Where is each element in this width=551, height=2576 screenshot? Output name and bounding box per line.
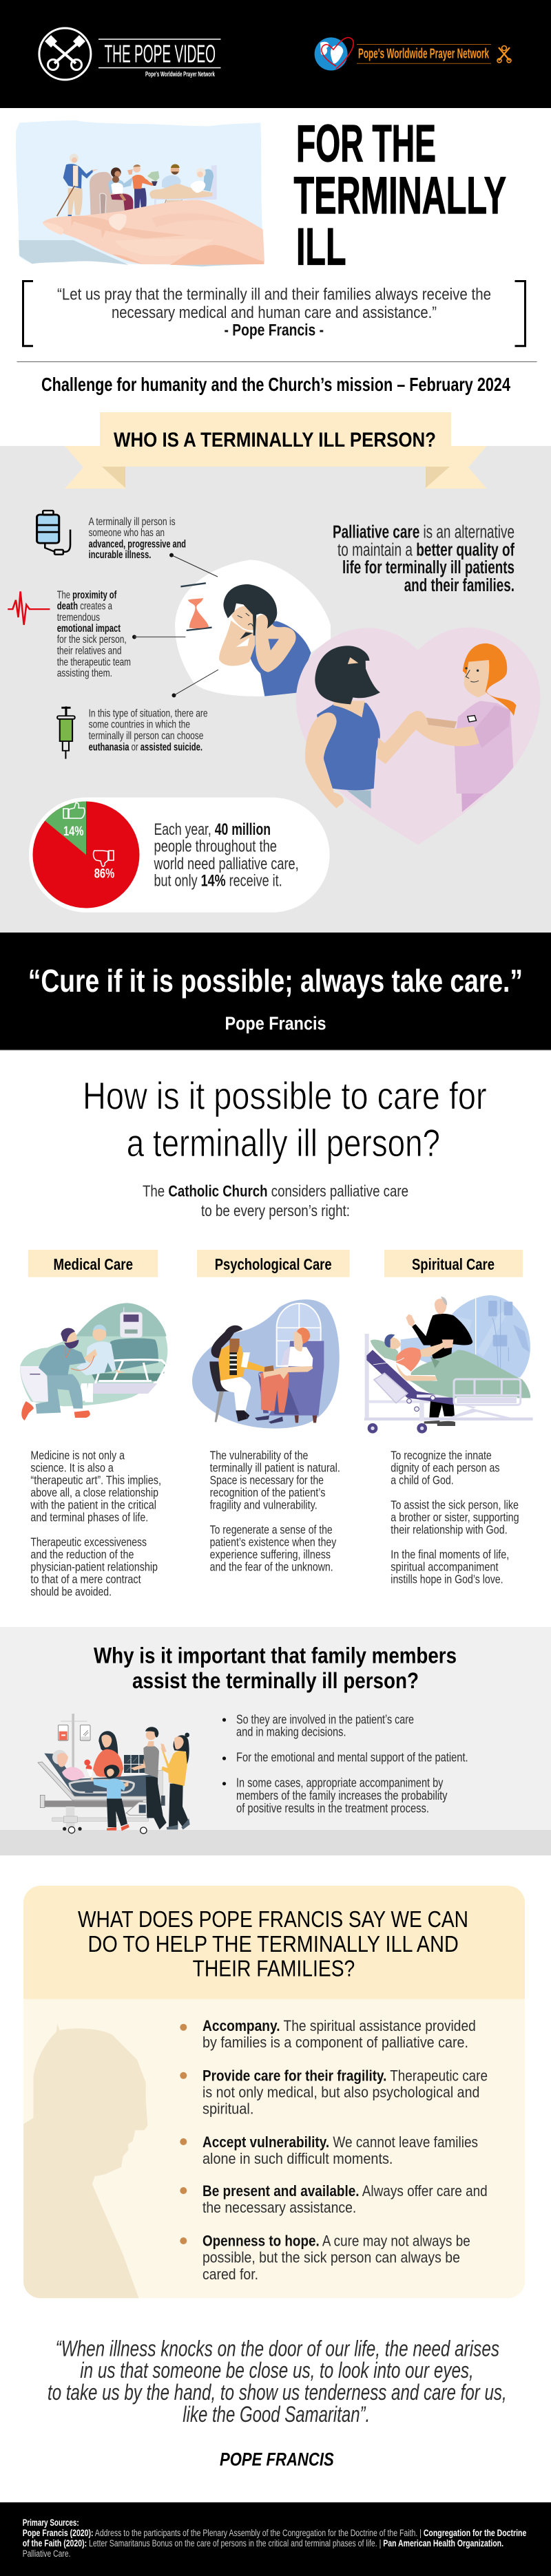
- title: [293, 115, 506, 277]
- care text: medical: and terminal phases of life.: [30, 1511, 148, 1524]
- child patient: [76, 1325, 125, 1402]
- icons on grey panel, reference coords: [8, 511, 75, 759]
- care text: medical: and the reduction of the: [30, 1548, 134, 1562]
- bullet list: [222, 1712, 468, 1815]
- prayer quote with brackets: - Pope Francis -: [225, 321, 324, 340]
- banner: cure if it is possible: [0, 933, 551, 1050]
- banner: cure if it is possible: Pope Francis: [225, 1013, 326, 1034]
- woman in yellow: [160, 1733, 190, 1829]
- closing quote: like the Good Samaritan”.: [183, 2402, 370, 2427]
- leader lines: [132, 553, 218, 697]
- callout text: euthanasia: [89, 708, 208, 753]
- icon: heartbeat: [8, 591, 50, 625]
- care text: spiritual: In the final moments of life,: [391, 1548, 509, 1562]
- patient: [371, 1334, 530, 1398]
- pie chart: 14 / 86: [33, 801, 139, 908]
- heading: [94, 1643, 457, 1693]
- callout text: proximity of death: for the sick person,: [57, 634, 127, 646]
- care text: spiritual: spiritual accompaniment: [391, 1560, 499, 1574]
- bullet list: of positive results in the treatment process.: [236, 1801, 429, 1815]
- heading: Why is it important that family members: [94, 1643, 457, 1668]
- list of five actions: Provide care for their fragility. Therapeutic care: [202, 2067, 488, 2084]
- armchair: [258, 1341, 324, 1416]
- care text: spiritual: a child of God.: [391, 1473, 454, 1487]
- logo: Pope's Worldwide Prayer Network: [315, 37, 511, 70]
- label: psychological care: Psychological Care: [215, 1255, 332, 1273]
- heading: assist the terminally ill person?: [132, 1668, 419, 1693]
- illustration: psychological care: [192, 1299, 340, 1429]
- panel: 40 million statistic: people throughout the: [154, 838, 277, 856]
- panel: why family members: [0, 1627, 551, 1855]
- prayer quote with brackets: “Let us pray that the terminally ill and their families always receive the: [57, 286, 491, 304]
- right woman: [413, 643, 516, 812]
- palliative care statement: [333, 522, 514, 595]
- footer: primary sources: Pope Francis (2020): Address to the participants of the Plenary Assembly of the Congregation for the Doctrine of the Faith. | Congregation for the Doctrine: [23, 2528, 527, 2538]
- list of five actions: Be present and available. Always offer care and: [202, 2182, 488, 2200]
- callout text: proximity of death: assisting them.: [57, 668, 112, 679]
- list of five actions: Accompany. The spiritual assistance provided: [202, 2017, 476, 2034]
- care text: medical: science. It is also a: [30, 1461, 114, 1475]
- label: medical care: [28, 1250, 158, 1277]
- prayer quote with brackets: [23, 281, 525, 346]
- care text: spiritual: their relationship with God.: [391, 1523, 508, 1537]
- heart: [296, 628, 541, 845]
- care text: medical: Medicine is not only a: [30, 1449, 125, 1462]
- list of five actions: is not only medical, but also psychological and: [202, 2084, 479, 2100]
- panel: 40 million statistic: Each year, 40 million: [154, 820, 271, 839]
- bed: [364, 1334, 533, 1434]
- bed rail: [454, 1379, 521, 1405]
- footer: primary sources: [0, 2502, 551, 2576]
- care text: medical: with the patient in the critical: [30, 1498, 156, 1512]
- heading: DO TO HELP THE TERMINALLY ILL AND: [88, 1931, 459, 1957]
- child: [90, 1765, 129, 1831]
- care text: psychological: and the fear of the unknown.: [210, 1560, 333, 1574]
- title: FOR THE: [296, 115, 436, 173]
- label: spiritual care: [384, 1250, 523, 1277]
- icon: IV bag: [37, 511, 70, 555]
- callout text: proximity of death: the therapeutic team: [57, 657, 131, 668]
- care text: psychological: patient’s existence when they: [210, 1535, 336, 1549]
- pie chart: 14 / 86: 14%: [63, 824, 83, 839]
- intro text: Catholic Church: The Catholic Church considers palliative care: [143, 1182, 408, 1200]
- illustration: sad woman in white blob: [175, 560, 541, 845]
- panel: 40 million statistic: world need palliative care,: [154, 855, 299, 873]
- label: psychological care: [197, 1250, 350, 1277]
- footer: primary sources: Primary Sources:: [23, 2518, 79, 2528]
- care text: psychological: recognition of the patient’s: [210, 1486, 326, 1500]
- gift: [124, 1755, 145, 1773]
- care text: spiritual: [391, 1449, 519, 1586]
- man with flowers: [127, 164, 159, 211]
- bullet list: So they are involved in the patient’s care: [236, 1712, 414, 1726]
- list of five actions: [180, 2017, 488, 2283]
- list of five actions: possible, but the sick person can always be: [202, 2249, 460, 2266]
- care text: spiritual: a brother or sister, supporting: [391, 1511, 519, 1524]
- label: medical care: Medical Care: [54, 1255, 133, 1273]
- callout text: definition: incurable illness.: [89, 549, 151, 561]
- icon: syringe: [57, 706, 75, 759]
- care text: psychological: experience suffering, illness: [210, 1548, 331, 1562]
- silhouette of Pope Francis: [23, 2023, 147, 2298]
- ribbon heading: [65, 412, 487, 489]
- heading: how is it possible to care: a terminally ill person?: [127, 1121, 440, 1164]
- bullet list: In some cases, appropriate accompaniment by: [236, 1776, 443, 1789]
- callout text: definition: someone who has an: [89, 527, 165, 539]
- illustration: medical care: [20, 1303, 167, 1420]
- callout text: proximity of death: [57, 589, 131, 679]
- list of five actions: spiritual.: [202, 2100, 253, 2118]
- intro text: Catholic Church: [143, 1182, 408, 1220]
- callout text: proximity of death: tremendous: [57, 612, 100, 624]
- bed: [38, 1754, 165, 1833]
- armchair with woman and child: [90, 167, 133, 217]
- title: ILL: [296, 218, 346, 277]
- care text: medical: to that of a mere contract: [30, 1573, 141, 1586]
- heading: WHAT DOES POPE FRANCIS SAY WE CAN: [78, 1906, 468, 1932]
- flowers: [84, 1760, 92, 1779]
- palliative care statement: and their families.: [404, 576, 514, 595]
- section: who is a terminally ill person background: [0, 446, 551, 933]
- callout text: euthanasia: euthanasia or assisted suicide.: [89, 741, 202, 753]
- illustration: spiritual care: [364, 1295, 533, 1434]
- care text: psychological: To regenerate a sense of the: [210, 1523, 333, 1537]
- care text: medical: “therapeutic art”. This implies,: [30, 1473, 161, 1487]
- callout text: proximity of death: their relatives and: [57, 646, 121, 657]
- patient: [255, 1328, 313, 1424]
- patient in bed with bearded man: [149, 164, 217, 212]
- hand: [43, 200, 264, 265]
- care text: psychological: [210, 1449, 340, 1574]
- prayer quote with brackets: necessary medical and human care and assistance.”: [112, 304, 437, 322]
- callout text: definition: [89, 516, 186, 561]
- heading: THEIR FAMILIES?: [193, 1956, 355, 1981]
- left woman: [305, 646, 425, 809]
- list of five actions: cared for.: [202, 2266, 258, 2283]
- callout text: proximity of death: The proximity of: [57, 589, 117, 602]
- care text: spiritual: To assist the sick person, like: [391, 1498, 519, 1512]
- header band: [0, 0, 551, 108]
- old man: [57, 153, 98, 217]
- callout text: definition: A terminally ill person is: [89, 516, 176, 528]
- callout text: euthanasia: In this type of situation, there are: [89, 708, 208, 720]
- care text: medical: [30, 1449, 161, 1599]
- visitor: [209, 1326, 274, 1423]
- care text: medical: physician-patient relationship: [30, 1560, 158, 1574]
- label: spiritual care: Spiritual Care: [412, 1255, 495, 1273]
- care text: psychological: The vulnerability of the: [210, 1449, 308, 1462]
- callout text: euthanasia: terminally ill person can choose: [89, 730, 203, 742]
- intro text: Catholic Church: to be every person’s right:: [201, 1202, 350, 1220]
- panel: 40 million statistic: but only 14% receive it.: [154, 872, 282, 891]
- list of five actions: by families is a component of palliative care.: [202, 2034, 468, 2051]
- heading: [78, 1906, 468, 1981]
- woman in red: [93, 1731, 123, 1777]
- callout text: proximity of death: death creates a: [57, 601, 112, 613]
- priest: [406, 1297, 472, 1426]
- logo: The Pope Video: THE POPE VIDEO: [105, 40, 216, 68]
- grandmother: [52, 1750, 85, 1780]
- doctor: [21, 1328, 97, 1420]
- heading: how is it possible to care: [83, 1074, 487, 1164]
- list of five actions: the necessary assistance.: [202, 2199, 356, 2216]
- list of five actions: Accept vulnerability. We cannot leave families: [202, 2133, 478, 2151]
- care text: medical: Therapeutic excessiveness: [30, 1535, 147, 1549]
- care text: spiritual: dignity of each person as: [391, 1461, 500, 1475]
- closing quote: POPE FRANCIS: [220, 2449, 334, 2470]
- list of five actions: alone in such difficult moments.: [202, 2150, 393, 2167]
- care text: medical: should be avoided.: [30, 1585, 112, 1599]
- panel: 40 million statistic: [29, 798, 330, 913]
- care text: spiritual: To recognize the innate: [391, 1449, 492, 1462]
- care text: medical: above all, a close relationship: [30, 1486, 158, 1500]
- ribbon heading: WHO IS A TERMINALLY ILL PERSON?: [114, 429, 436, 451]
- pie chart: 14 / 86: 86%: [94, 867, 114, 882]
- bullet list: For the emotional and mental support of the patient.: [236, 1750, 468, 1764]
- care text: psychological: Space is necessary for the: [210, 1473, 324, 1487]
- palliative care statement: to maintain a better quality of: [337, 541, 514, 560]
- care text: spiritual: instills hope in God’s love.: [391, 1573, 503, 1586]
- footer: primary sources: of the Faith (2020): Letter Samaritanus Bonus on the care of persons in the critical and terminal phases of life. | Pan American Health Organization.: [23, 2538, 503, 2548]
- closing quote: [48, 2336, 507, 2470]
- panel: what does Pope Francis say: [23, 1886, 525, 2298]
- list of five actions: Openness to hope. A cure may not always be: [202, 2233, 470, 2249]
- hero illustration: family on a hand: [16, 120, 264, 266]
- heading: how is it possible to care: How is it possible to care for: [83, 1074, 487, 1118]
- logo: The Pope Video: [39, 28, 221, 80]
- man in grey: [131, 1727, 167, 1829]
- palliative care statement: Palliative care is an alternative: [333, 522, 514, 542]
- callout text: definition: advanced, progressive and: [89, 539, 186, 551]
- callout text: proximity of death: emotional impact: [57, 623, 121, 635]
- bullet list: and in making decisions.: [236, 1725, 346, 1739]
- sad woman figure: [219, 584, 311, 696]
- footer: primary sources: Palliative Care.: [23, 2548, 71, 2559]
- bullet list: members of the family increases the probability: [236, 1789, 448, 1802]
- care text: psychological: terminally ill patient is natural.: [210, 1461, 340, 1475]
- icon: hourglass: [180, 583, 212, 630]
- illustration: family around bed: [38, 1714, 190, 1833]
- callout text: euthanasia: some countries in which the: [89, 719, 190, 731]
- care text: psychological: fragility and vulnerability.: [210, 1498, 318, 1512]
- logo: The Pope Video: Pope's Worldwide Prayer Network: [145, 70, 215, 78]
